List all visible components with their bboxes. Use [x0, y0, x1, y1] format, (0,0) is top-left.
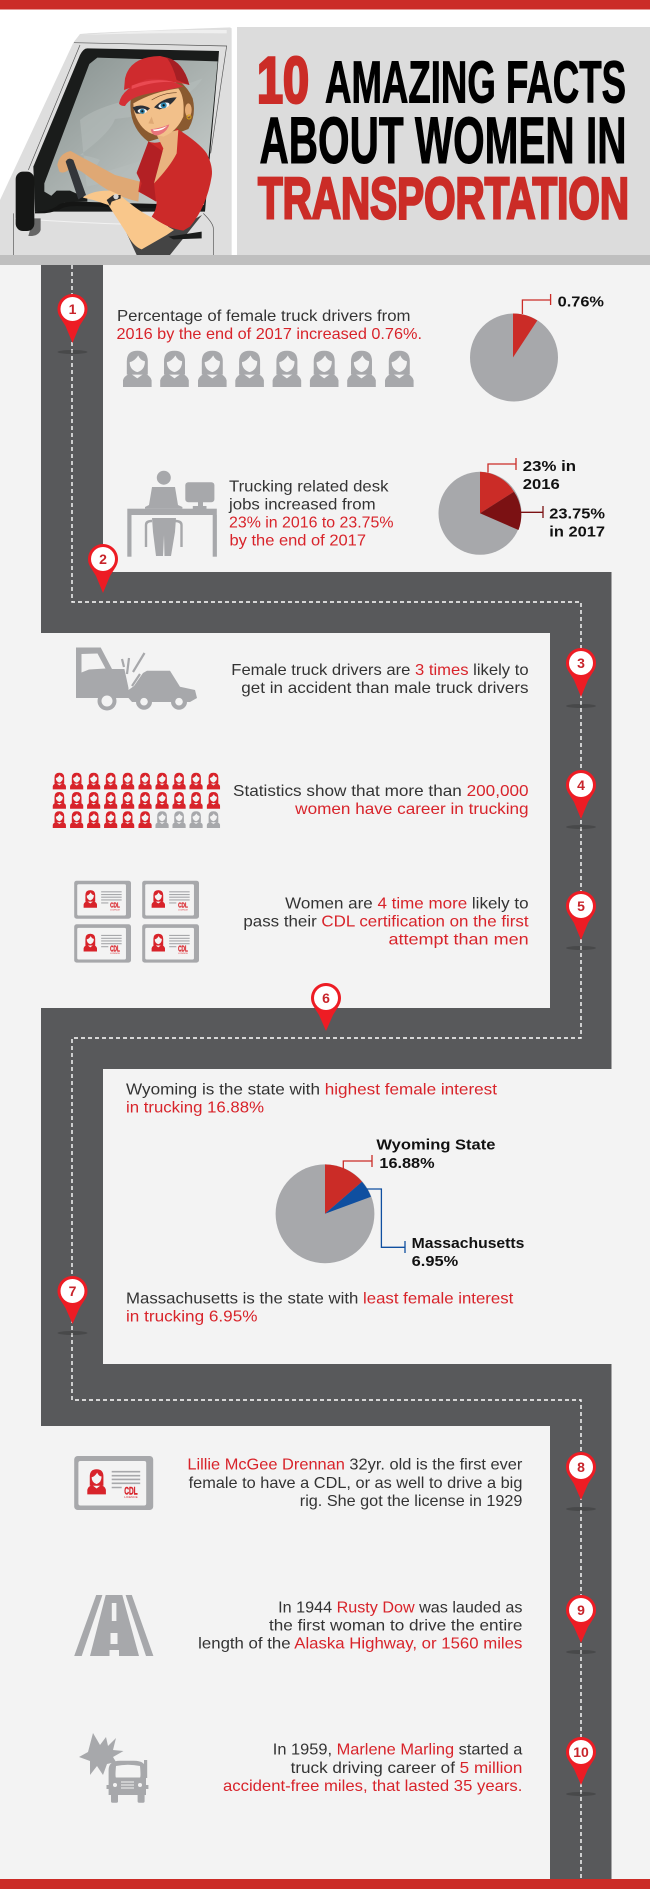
fact 6 text: in trucking 16.88%	[126, 1099, 264, 1116]
pie chart: 23% and 23.75%: 23% in	[523, 459, 576, 475]
icon: truck with burst	[79, 1733, 148, 1803]
fact 1 text: 2016 by the end of 2017 increased 0.76%.	[116, 326, 422, 343]
fact 5 text: Women are 4 time more likely to	[285, 895, 529, 912]
pie chart: 23% and 23.75%	[438, 458, 605, 555]
icon group: four CDL cards: LICENCE	[110, 909, 120, 911]
icon group: four CDL cards: CDL	[110, 945, 120, 953]
icon: person at desk	[127, 471, 217, 557]
icon group: four CDL cards: CDL	[178, 945, 188, 953]
pin 5: 5	[577, 898, 585, 914]
pie chart: 23% and 23.75%: 2016	[523, 477, 560, 493]
pin 6	[311, 983, 341, 1031]
pie chart: Wyoming and Massachusetts: Wyoming State	[376, 1138, 495, 1154]
fact 6 text: Wyoming is the state with highest female interest	[126, 1081, 498, 1098]
pin 9	[566, 1595, 596, 1654]
icon: CDL card: LICENCE	[124, 1495, 138, 1499]
pin 9: 9	[577, 1602, 585, 1618]
fact 8 text: female to have a CDL, or as well to drive a big	[189, 1475, 522, 1492]
header white area	[0, 0, 650, 256]
fact 8 text: rig. She got the license in 1929	[300, 1493, 522, 1510]
fact 9 text	[198, 1599, 523, 1653]
pin 2: 2	[99, 551, 107, 567]
fact 5 text: attempt than men	[388, 932, 529, 949]
fact 8 text: Lillie McGee Drennan 32yr. old is the first ever	[187, 1457, 522, 1474]
pin 7: 7	[69, 1283, 77, 1299]
fact 6 text	[126, 1081, 498, 1116]
fact 4 text	[233, 783, 529, 818]
fact 1 text: Percentage of female truck drivers from	[117, 308, 410, 325]
fact 2 text: Trucking related desk	[229, 479, 389, 496]
pie chart: 0.76%: 0.76%	[558, 295, 604, 311]
sill	[35, 202, 158, 213]
icon: CDL card: CDL	[124, 1485, 138, 1497]
pie chart: 0.76%	[470, 294, 604, 402]
icon grid: women count	[53, 773, 220, 828]
fact 4 text: Statistics show that more than 200,000	[233, 783, 529, 800]
fact 2 text	[228, 479, 394, 550]
pin 8: 8	[577, 1459, 585, 1475]
mirror	[28, 218, 41, 236]
fact 8 text	[187, 1457, 522, 1510]
title text: 10	[257, 44, 309, 116]
fact 5 text: pass their CDL certification on the first	[243, 913, 529, 930]
pie chart: Wyoming and Massachusetts: Massachusetts	[412, 1236, 524, 1252]
pin 1: 1	[69, 301, 77, 317]
fact 3 text: get in accident than male truck drivers	[241, 680, 529, 697]
fact 9 text: the first woman to drive the entire	[269, 1617, 522, 1634]
fact 2 text: jobs increased from	[228, 497, 376, 514]
pin 3	[566, 648, 596, 708]
fact 9 text: In 1944 Rusty Dow was lauded as	[278, 1599, 523, 1616]
bottom red bar	[0, 1879, 650, 1889]
icon: CDL card	[74, 1456, 153, 1510]
top red bar	[0, 0, 650, 10]
pie chart: 23% and 23.75%: in 2017	[549, 525, 605, 541]
icon: highway	[74, 1595, 153, 1656]
fact 1 text	[116, 308, 422, 343]
left arm	[57, 151, 140, 202]
fact 10 text: truck driving career of 5 million	[291, 1760, 522, 1777]
hair behind	[130, 82, 194, 142]
fact 10 text: In 1959, Marlene Marling started a	[273, 1742, 523, 1759]
fact 7 text: Massachusetts is the state with least female interest	[126, 1290, 514, 1307]
pin 5	[566, 891, 596, 950]
fact 3 text: Female truck drivers are 3 times likely to	[231, 662, 529, 679]
title text	[257, 44, 629, 232]
icon group: four CDL cards	[74, 881, 199, 963]
cap	[124, 56, 189, 90]
fact 10 text: accident-free miles, that lasted 35 years.	[223, 1778, 522, 1795]
pin 8	[566, 1452, 596, 1511]
fact 2 text: by the end of 2017	[230, 533, 366, 550]
icon group: four CDL cards: LICENCE	[178, 953, 188, 955]
eyes and mouth	[133, 106, 150, 114]
illustration: woman driving truck	[0, 27, 232, 255]
icon group: four CDL cards: CDL	[110, 901, 120, 910]
icon group: four CDL cards: CDL	[178, 901, 188, 910]
pin 7	[58, 1276, 88, 1335]
pin 1	[58, 294, 88, 354]
pie chart: Wyoming and Massachusetts: 6.95%	[412, 1254, 458, 1270]
fact 2 text: 23% in 2016 to 23.75%	[229, 515, 394, 532]
fact 5 text	[243, 895, 529, 949]
pin 10	[566, 1737, 596, 1796]
pin 10: 10	[573, 1744, 589, 1760]
pie chart: Wyoming and Massachusetts: 16.88%	[379, 1156, 435, 1172]
fact 3 text	[231, 662, 529, 697]
icon: truck and car crash	[76, 648, 197, 710]
road	[41, 265, 612, 1879]
face	[133, 88, 184, 137]
fact 10 text	[223, 1742, 523, 1795]
shirt	[137, 128, 212, 231]
icon group: four CDL cards: LICENCE	[178, 909, 188, 911]
icon group: four CDL cards: LICENCE	[110, 953, 120, 955]
icon row: eight women	[123, 351, 414, 387]
title panel	[237, 27, 650, 256]
fact 4 text: women have career in trucking	[294, 801, 529, 818]
pin 2	[88, 544, 118, 593]
right arm	[83, 191, 174, 249]
fact 7 text: in trucking 6.95%	[126, 1309, 258, 1326]
pin 3: 3	[577, 655, 585, 671]
fact 9 text: length of the Alaska Highway, or 1560 miles	[198, 1636, 523, 1653]
header base strip	[0, 255, 650, 265]
pie chart: Wyoming and Massachusetts	[276, 1138, 524, 1270]
pin 4: 4	[577, 777, 585, 793]
fact 7 text	[126, 1290, 514, 1326]
pin 4	[566, 770, 596, 829]
pie chart: 23% and 23.75%: 23.75%	[549, 507, 605, 523]
pin 6: 6	[322, 990, 330, 1006]
